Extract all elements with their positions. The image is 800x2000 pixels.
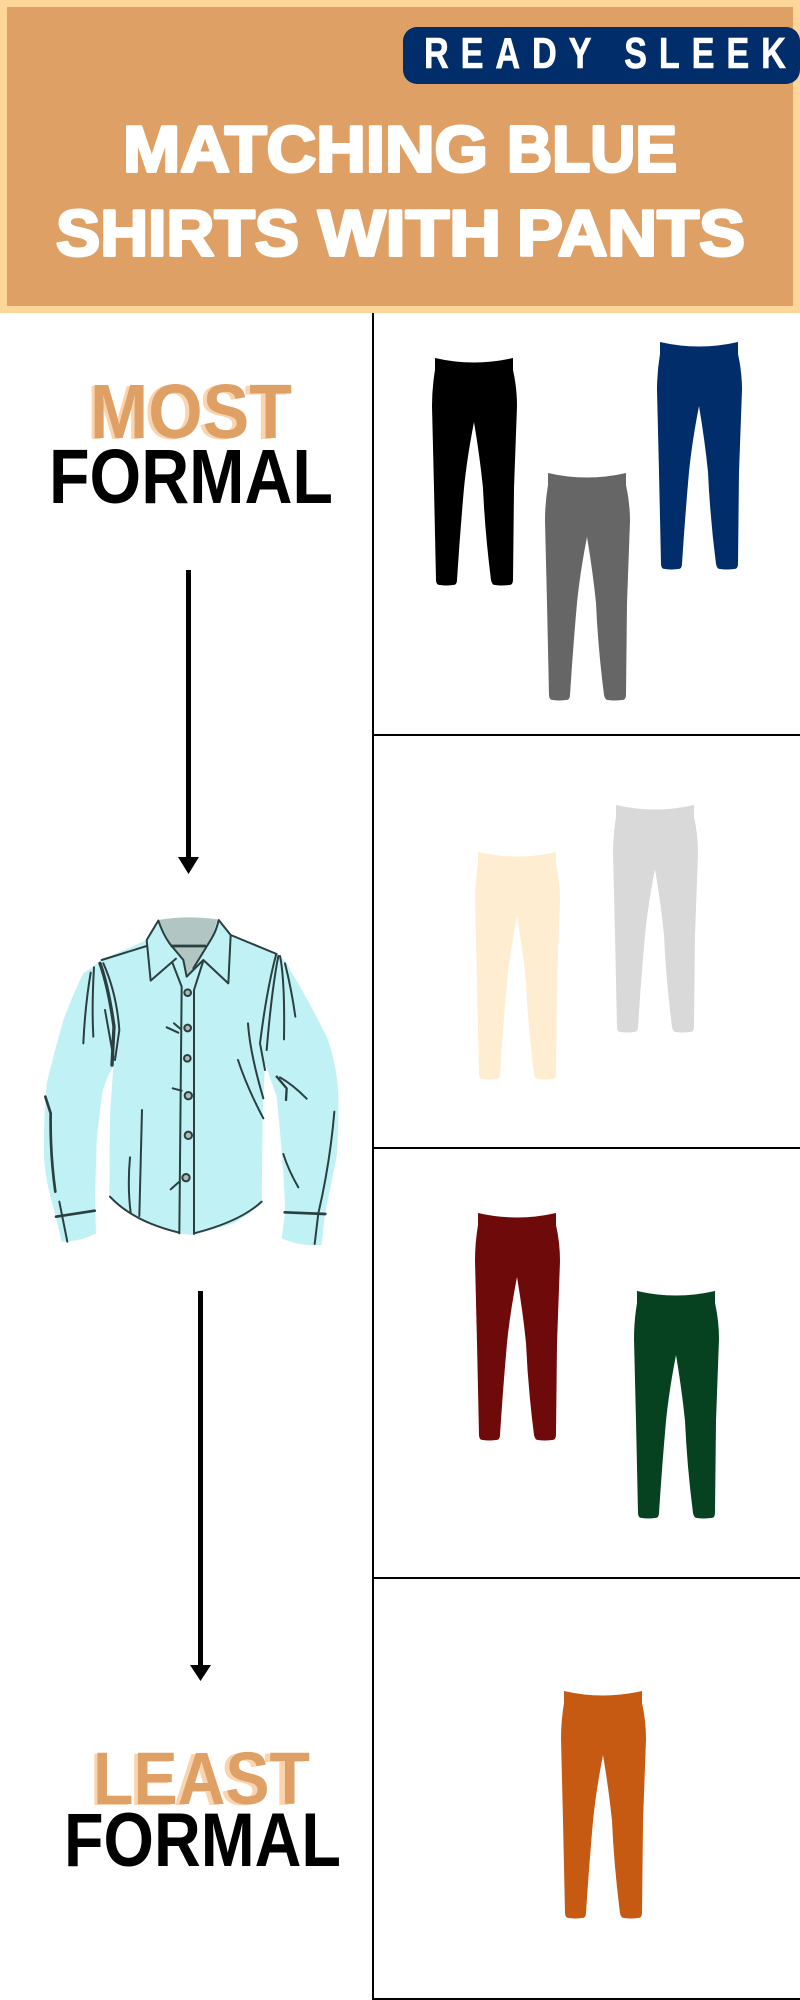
- arrow: down from shirt to least formal: [190, 1291, 211, 1681]
- icon: rust orange pants: [561, 1691, 646, 1918]
- heading: least formal: [64, 1737, 341, 1883]
- table grid lines: [373, 313, 800, 2000]
- title: [56, 112, 745, 270]
- icon: cream pants: [475, 852, 560, 1080]
- heading: least formal: LEAST: [90, 1738, 304, 1821]
- heading: most formal: MOST: [90, 369, 292, 455]
- icon: black pants: [432, 358, 517, 586]
- heading: most formal: FORMAL: [49, 434, 333, 520]
- icon: maroon pants: [475, 1213, 560, 1440]
- heading: most formal: [49, 369, 333, 520]
- shirt body fill: [44, 920, 338, 1245]
- shirt inner neck: [158, 917, 217, 975]
- icon: dark green pants: [634, 1291, 719, 1518]
- icon: gray pants: [545, 473, 630, 700]
- icon: light gray pants: [613, 805, 698, 1032]
- heading: least formal: FORMAL: [64, 1798, 341, 1883]
- icon: navy pants: [657, 342, 742, 570]
- panel: header banner: [0, 0, 800, 313]
- heading: least formal: LEAST: [93, 1737, 310, 1820]
- icon: light blue dress shirt: [44, 917, 338, 1245]
- title: PANTS: [517, 196, 745, 270]
- title: SHIRTS: [56, 196, 299, 270]
- title: MATCHING: [123, 112, 488, 186]
- title: BLUE: [507, 112, 677, 186]
- arrow: down from most formal to shirt: [178, 570, 199, 874]
- shirt outlines: [45, 920, 334, 1244]
- title: WITH: [318, 196, 501, 270]
- heading: most formal: MOST: [87, 370, 287, 456]
- shirt buttons: [182, 989, 192, 1181]
- badge: Ready Sleek: READY SLEEK: [424, 29, 786, 78]
